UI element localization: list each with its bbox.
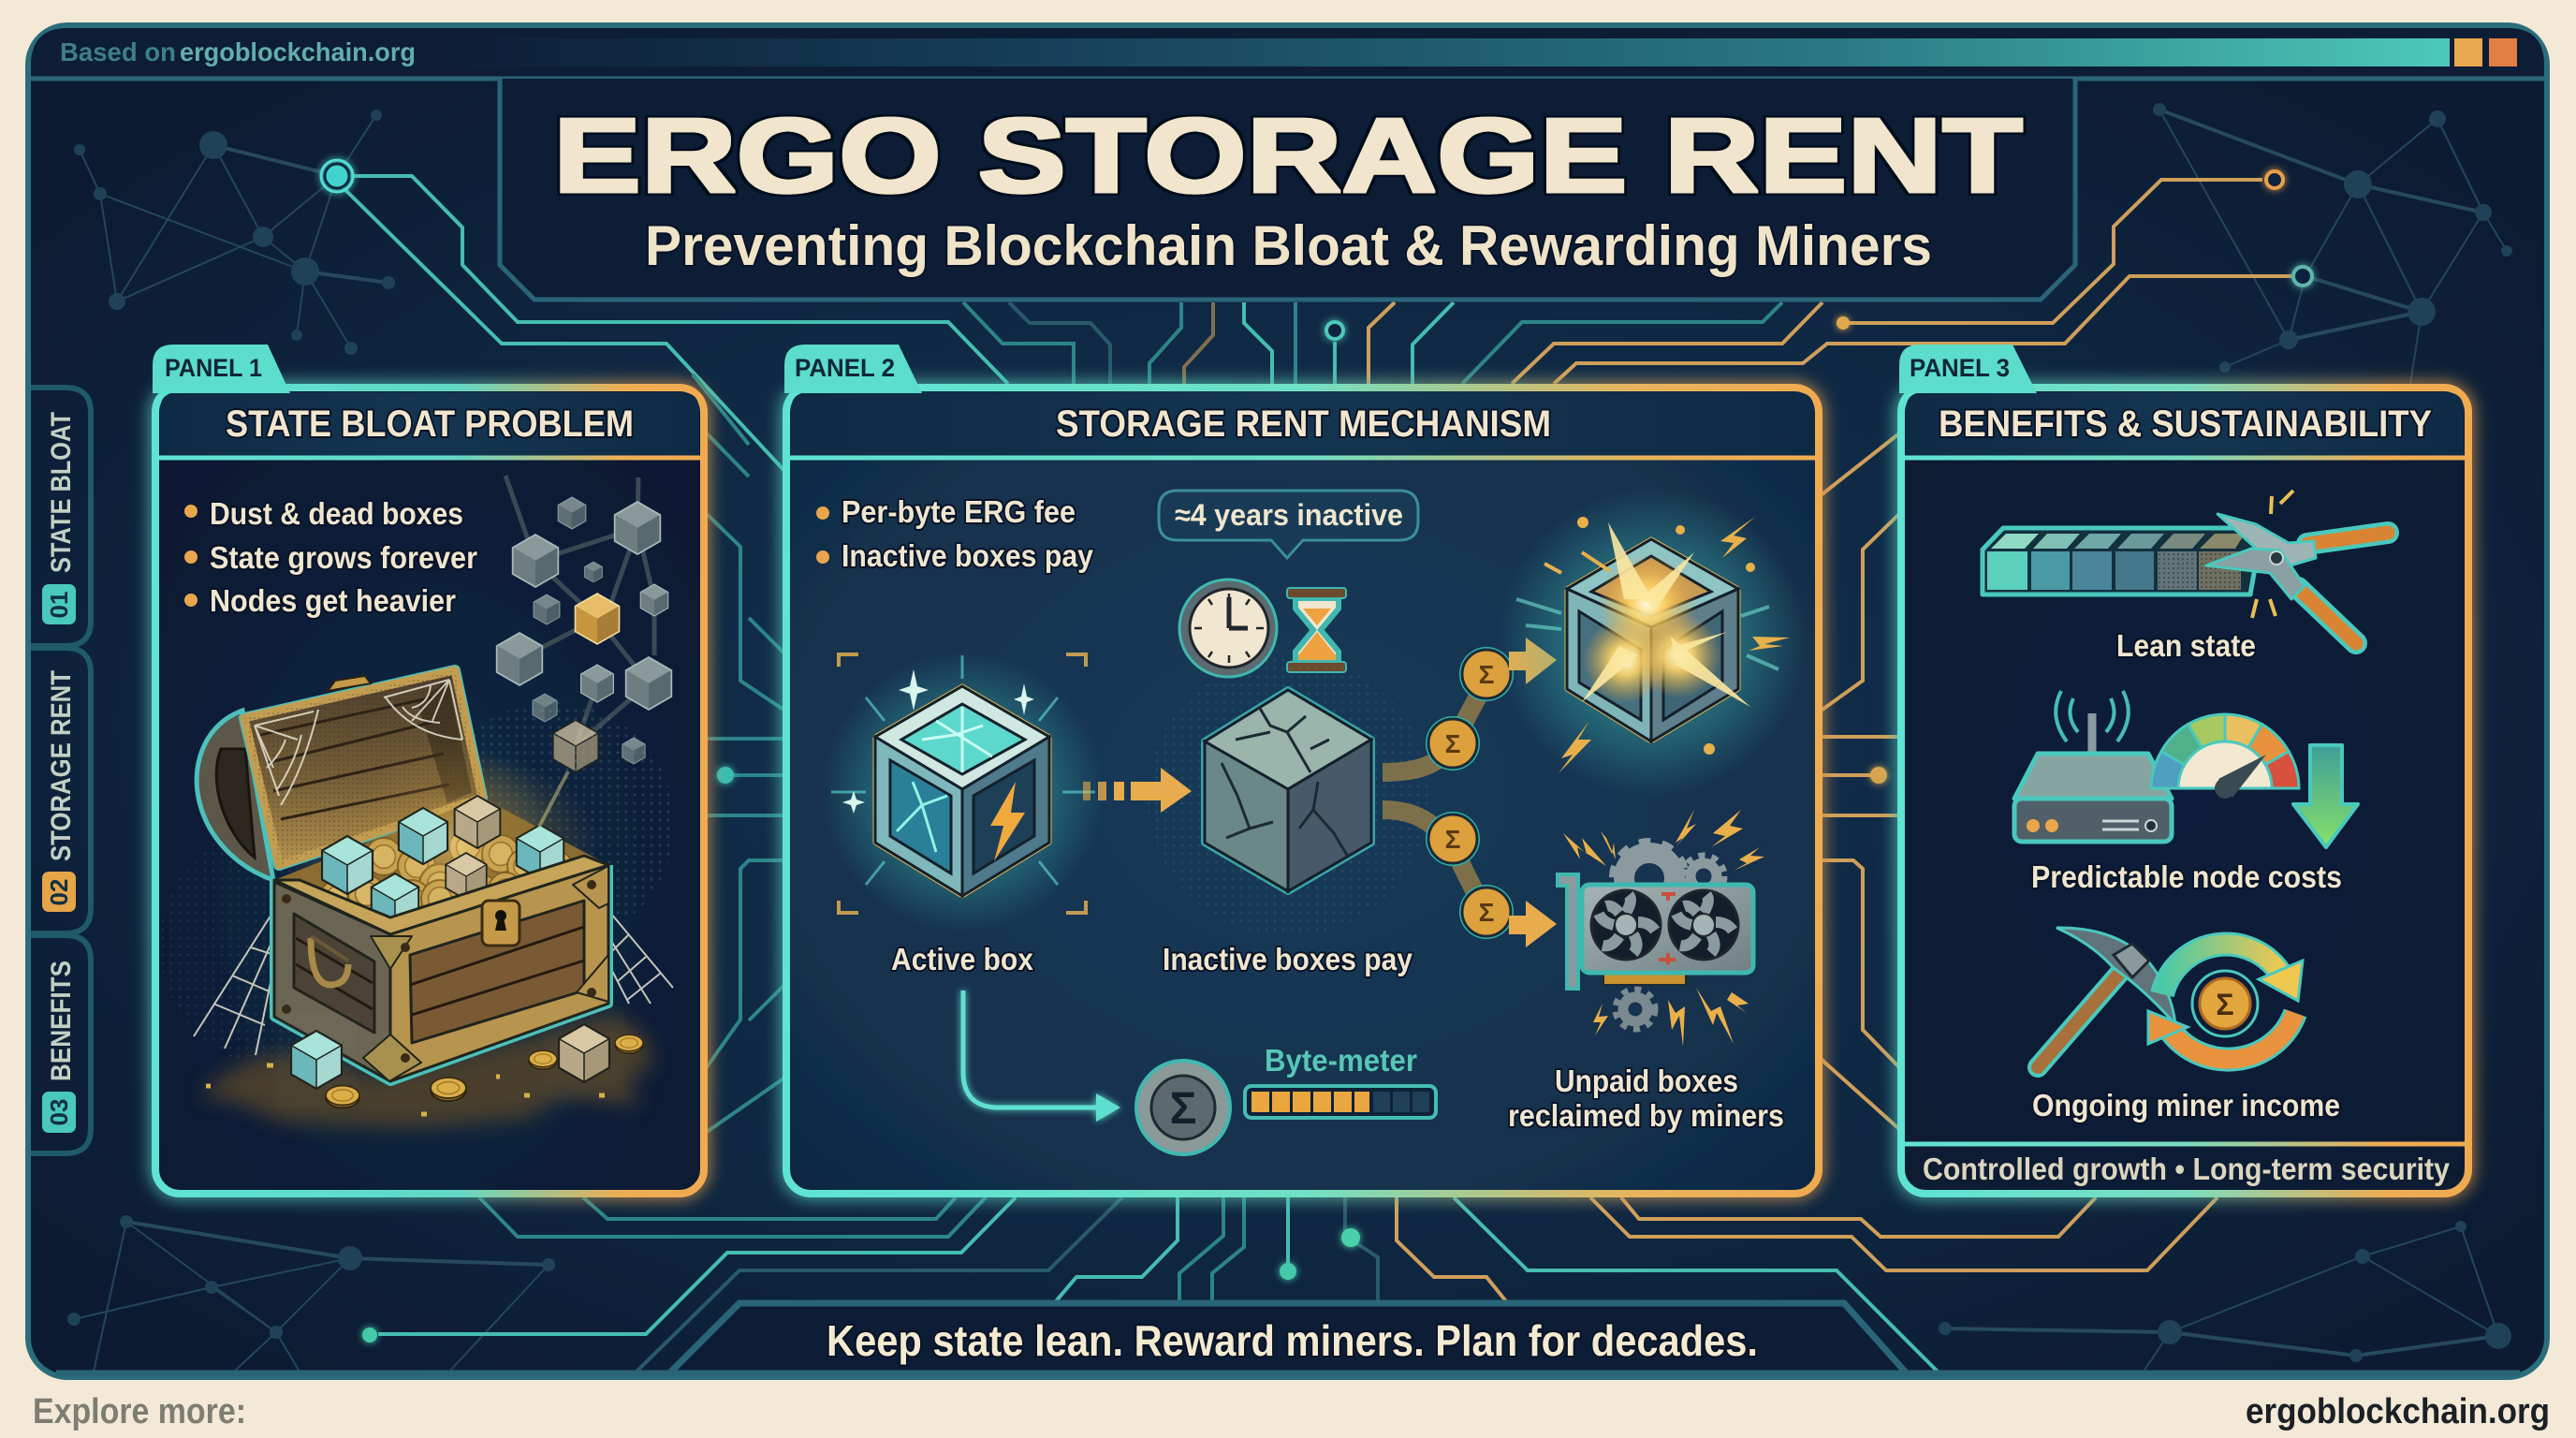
panel 1 tab [153, 345, 290, 393]
panel 2: storage rent mechanism [784, 345, 1819, 1194]
network: bottom left [67, 1215, 555, 1372]
tab: benefits: BENEFITS [46, 961, 77, 1081]
panel 1 heading: STATE BLOAT PROBLEM [226, 404, 634, 445]
panel 3 heading: BENEFITS & SUSTAINABILITY [1939, 404, 2432, 445]
icon: pruning shears [2206, 491, 2388, 643]
arrows to burst box and miner [1509, 638, 1557, 947]
chest opening and coins [274, 740, 608, 946]
icon: cost gauge [2151, 714, 2299, 799]
title panel [500, 79, 2075, 300]
footer: explore more: Explore more: [33, 1392, 246, 1431]
panel 1 header band [160, 392, 699, 458]
icon: node router [2014, 691, 2172, 842]
network: top right [2153, 103, 2512, 384]
panel 1 bullet list: State grows forever [210, 540, 477, 575]
labels: panel 2 captions: Active box [891, 942, 1034, 976]
icon: hourglass [1287, 588, 1346, 672]
connector: coins to burst box [1383, 679, 1488, 913]
label: ongoing miner income: Ongoing miner income [2032, 1088, 2340, 1123]
labels: panel 2 captions [891, 942, 1784, 1133]
arrow: active to inactive [1083, 768, 1192, 813]
panel 2 frame [786, 388, 1819, 1194]
byte meter [1245, 1043, 1436, 1118]
icon: scattered box network [497, 476, 671, 772]
tab: storage rent: 02 [45, 879, 73, 905]
coins on connectors: Σ [1445, 825, 1460, 854]
label: predictable node costs: Predictable node costs [2031, 859, 2342, 894]
source note: ergoblockchain.org [180, 37, 416, 66]
trace nodes [321, 160, 2312, 1343]
icon: bursting box [1498, 488, 1807, 797]
wood panels [410, 901, 584, 1043]
callout: inactivity period: ≈4 years inactive [1175, 498, 1403, 532]
tab: state bloat [31, 388, 91, 646]
ground dust [201, 1016, 651, 1128]
icon: clock [1179, 580, 1277, 677]
chest body [274, 856, 608, 1081]
labels: panel 2 captions: reclaimed by miners [1508, 1098, 1784, 1133]
labels: panel 2 captions: Inactive boxes pay [1163, 942, 1413, 976]
icon: recurring income cycle [2148, 945, 2303, 1060]
loose boxes and coins [206, 1024, 643, 1114]
panel 2 tab [784, 345, 922, 393]
circuit traces [343, 176, 2293, 1375]
chest lid [197, 670, 482, 880]
panel 1: state bloat problem [153, 345, 704, 1194]
tab: storage rent: STORAGE RENT [46, 670, 77, 861]
label: lean state: Lean state [2116, 628, 2256, 663]
coins on connectors: Σ [1445, 729, 1460, 758]
icon: pruned state bar [1983, 528, 2258, 594]
icon: corner brackets [839, 654, 1086, 913]
header strip [31, 28, 2544, 79]
gears [1614, 843, 1724, 1029]
panel 3 footer: Controlled growth • Long-term security [1923, 1152, 2451, 1186]
tab: storage rent [31, 648, 91, 933]
icon: inactive cracked box [1148, 655, 1428, 936]
panel 2 bullet list [816, 494, 1094, 573]
panel 1 frame [155, 388, 704, 1194]
callout: inactivity period [1159, 491, 1418, 558]
icon: ERG coin: Σ [1170, 1084, 1196, 1134]
icon: treasure chest [159, 670, 674, 1128]
cobwebs [194, 680, 673, 1055]
source note: Based on [60, 37, 176, 66]
tab: state bloat: STATE BLOAT [46, 412, 77, 573]
arrow: active box to ERG fee [963, 990, 1120, 1122]
panel 2 tab: PANEL 2 [795, 354, 895, 382]
icon: ERG coin [1136, 1061, 1230, 1154]
source note [60, 37, 416, 66]
labels: panel 2 captions: Unpaid boxes [1555, 1064, 1738, 1098]
footer: site link: ergoblockchain.org [2246, 1392, 2550, 1431]
tab: state bloat: 01 [45, 592, 73, 618]
panel 3 header band [1906, 392, 2464, 458]
sidebar navigation [31, 388, 91, 1153]
panel 1 tab: PANEL 1 [165, 354, 262, 382]
panel 1 bullet list [184, 496, 477, 618]
panel 3 tab: PANEL 3 [1910, 354, 2010, 382]
panel 2 header band [791, 392, 1814, 458]
panel 3 tab [1899, 345, 2037, 393]
panel 3: benefits and sustainability [1899, 345, 2468, 1194]
icon: recurring income cycle: Σ [2216, 988, 2234, 1021]
bottom banner [56, 1303, 2520, 1373]
panel 3 frame [1901, 388, 2468, 1194]
panel 1 bullet list: Nodes get heavier [210, 583, 456, 618]
subtitle: Preventing Blockchain Bloat & Rewarding Miners [645, 214, 1932, 277]
takeaway text: Keep state lean. Reward miners. Plan for decades. [827, 1316, 1758, 1365]
panel 2 heading: STORAGE RENT MECHANISM [1056, 404, 1551, 445]
network: top left [74, 110, 395, 355]
icon: downward arrow [2293, 745, 2358, 847]
tab: benefits: 03 [45, 1099, 73, 1125]
panel 2 bullet list: Inactive boxes pay [842, 538, 1094, 573]
coins on connectors: Σ [1479, 660, 1494, 689]
panel 2 bullet list: Per-byte ERG fee [842, 494, 1076, 529]
tab: benefits [31, 935, 91, 1153]
network: bottom right [1939, 1221, 2511, 1372]
icon: pickaxe [2038, 928, 2175, 1067]
panel 1 bullet list: Dust & dead boxes [210, 496, 463, 531]
byte meter: Byte-meter [1265, 1043, 1417, 1078]
icon: active box [822, 652, 1103, 932]
coins on connectors: Σ [1479, 898, 1494, 927]
coins on connectors [1426, 647, 1514, 939]
title: ERGO STORAGE RENT [553, 96, 2023, 214]
icon: miner GPU [1558, 810, 1764, 1047]
